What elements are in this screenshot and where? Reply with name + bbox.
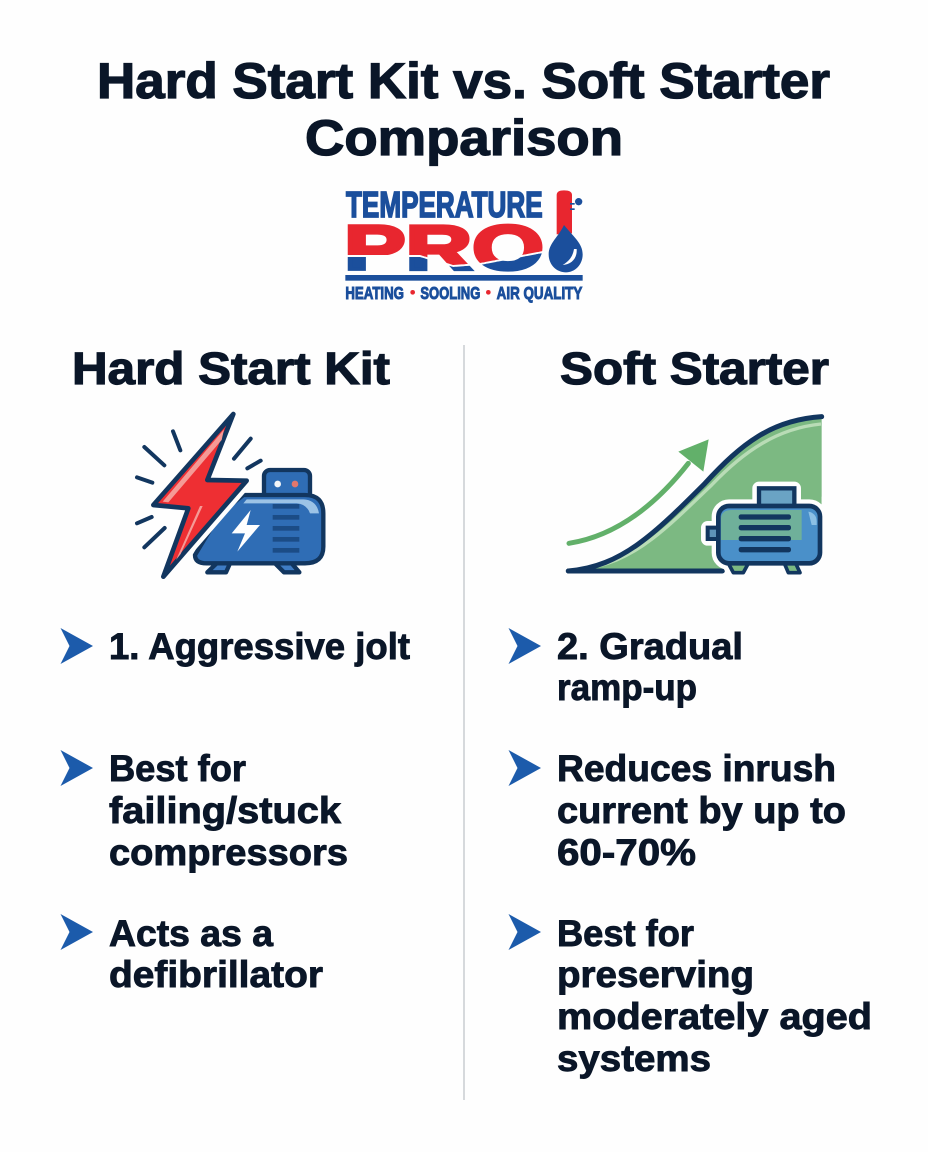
title: Comparison (305, 110, 623, 166)
bullet: Acts as a defibrillator (60, 913, 323, 995)
title: Hard Start Kit vs. Soft Starter (97, 53, 830, 109)
logo: Temperature Pro: TEMPERATURE (346, 184, 543, 225)
column divider (463, 345, 465, 1100)
bullet: 1. Aggressive jolt: 1. Aggressive jolt (109, 626, 410, 667)
heading: Hard Start Kit: Hard Start Kit (72, 343, 390, 394)
logo: Temperature Pro: PRO (344, 213, 544, 283)
bullet: 2. Gradual ramp-up (508, 626, 743, 708)
bullet: Reduces inrush current by up to 60-70%: current by up to (557, 790, 846, 831)
heading: Soft Starter: Soft Starter (560, 343, 829, 394)
bullet: Best for failing/stuck compressors: failing/stuck (109, 790, 341, 831)
bullet: Reduces inrush current by up to 60-70%: Reduces inrush (557, 748, 836, 789)
bullet: Best for preserving moderately aged systems: preserving (557, 954, 754, 995)
bullet: Best for failing/stuck compressors (60, 748, 348, 873)
logo: Temperature Pro: AIR QUALITY (497, 283, 582, 303)
logo: Temperature Pro: SOOLING (420, 283, 480, 303)
logo: Temperature Pro (344, 184, 583, 303)
bullet: Best for preserving moderately aged systems (508, 913, 872, 1079)
icon: lightning bolt and motor (137, 414, 323, 577)
icon: soft start ramp and motor (568, 417, 835, 577)
bullet: Best for preserving moderately aged systems: moderately aged (557, 996, 872, 1037)
bullet: Reduces inrush current by up to 60-70%: 60-70% (557, 832, 696, 873)
logo: Temperature Pro: PRO (344, 213, 544, 283)
bullet: Best for failing/stuck compressors: Best for (109, 748, 246, 789)
bullet: 2. Gradual ramp-up: 2. Gradual (557, 626, 743, 667)
bullet: Acts as a defibrillator: Acts as a (109, 913, 273, 954)
logo: Temperature Pro: HEATING (345, 283, 404, 303)
title (97, 53, 830, 166)
bullet: Best for failing/stuck compressors: compressors (109, 832, 348, 873)
bullet: Reduces inrush current by up to 60-70% (508, 748, 846, 873)
bullet: Best for preserving moderately aged systems: Best for (557, 913, 694, 954)
bullet: 2. Gradual ramp-up: ramp-up (557, 667, 697, 708)
bullet: Best for preserving moderately aged systems: systems (557, 1038, 711, 1079)
bullet: Acts as a defibrillator: defibrillator (109, 954, 323, 995)
